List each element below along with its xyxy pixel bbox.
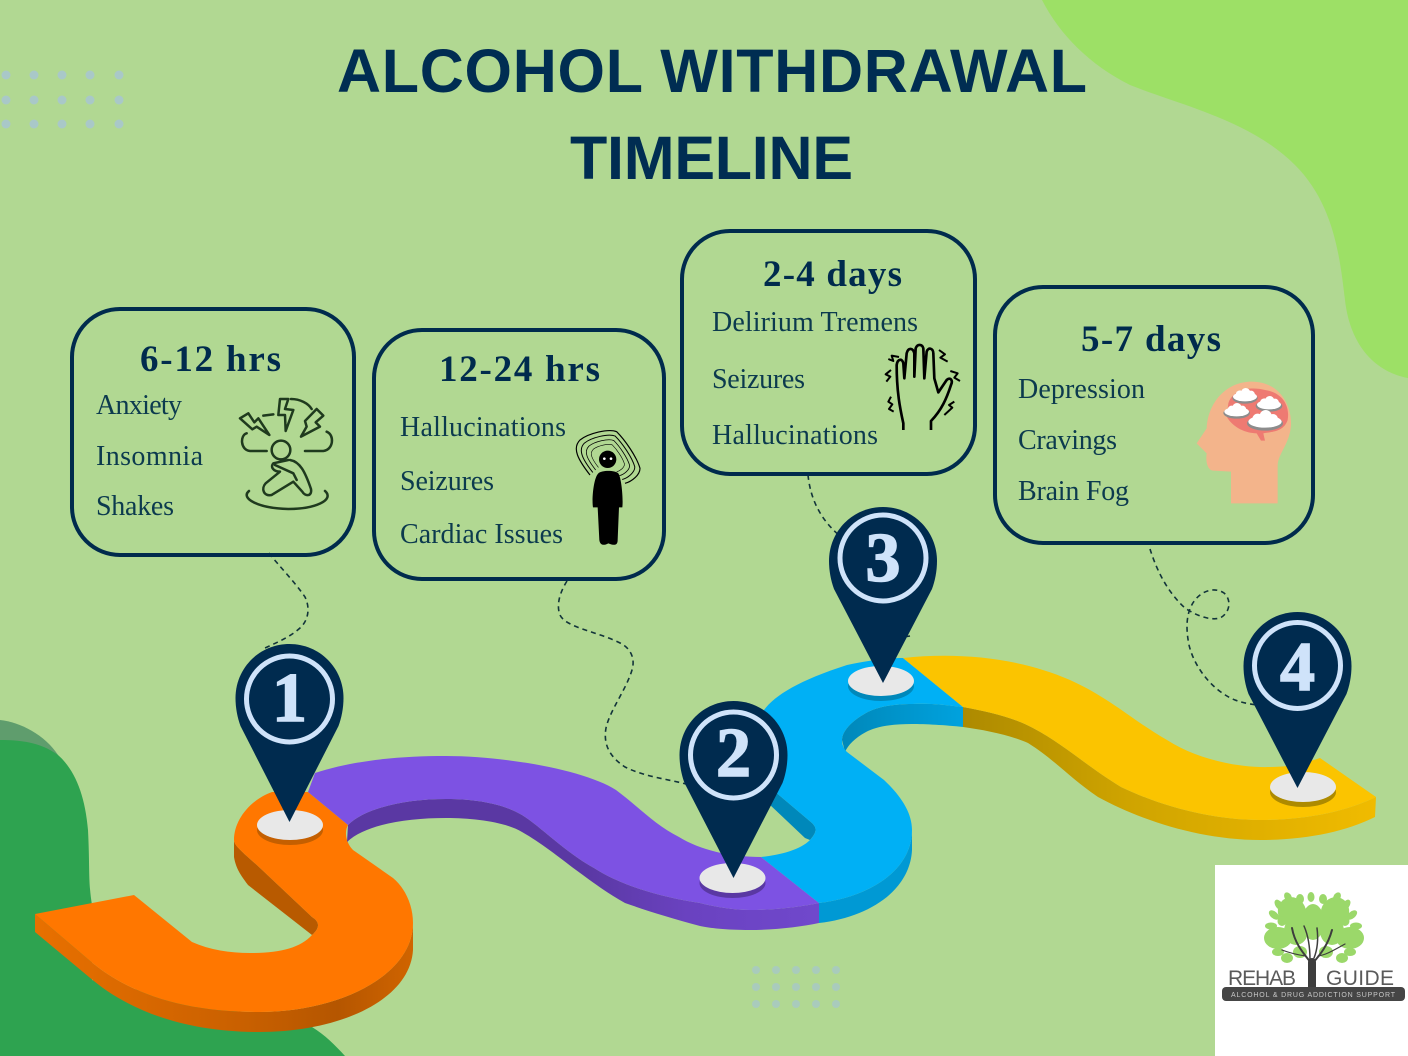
- pin base 4: [1270, 772, 1336, 807]
- title: TIMELINE: [570, 124, 853, 192]
- title: [337, 37, 1087, 192]
- connector: card 4 to pin 4: [1150, 549, 1257, 705]
- panel: 2-4 days: [682, 231, 975, 474]
- pin 2: 2: [716, 715, 751, 792]
- panel: 5-7 days: Depression: [1018, 374, 1145, 405]
- logo: Rehab Guide: REHAB: [1228, 967, 1296, 990]
- pin base 2: [700, 863, 766, 898]
- panel: 12-24 hrs: 12-24 hrs: [439, 349, 600, 390]
- icon: stressed person: [240, 399, 332, 509]
- panel: 12-24 hrs: Hallucinations: [400, 412, 566, 443]
- panel: 6-12 hrs: Shakes: [96, 491, 174, 522]
- connector: card 2 to pin 2: [558, 581, 690, 785]
- panel: 2-4 days: Seizures: [712, 364, 805, 395]
- road: orange segment: [35, 792, 413, 1032]
- title: ALCOHOL WITHDRAWAL: [337, 37, 1087, 105]
- icon: shaking hand: [886, 345, 960, 430]
- blob: bottom left: [0, 720, 345, 1056]
- pin 1: 1: [272, 660, 307, 737]
- panel: 2-4 days: 2-4 days: [763, 254, 902, 295]
- panel: 2-4 days: Delirium Tremens: [712, 307, 918, 338]
- panel: 5-7 days: 5-7 days: [1081, 319, 1221, 360]
- panel: 12-24 hrs: Cardiac Issues: [400, 519, 563, 550]
- road: blue segment: [750, 658, 963, 923]
- panel: 2-4 days: Hallucinations: [712, 420, 878, 451]
- panel: 6-12 hrs: Anxiety: [96, 390, 182, 421]
- panel: 12-24 hrs: Seizures: [400, 466, 494, 497]
- panel: 5-7 days: [995, 287, 1313, 543]
- panel: 6-12 hrs: 6-12 hrs: [140, 339, 281, 380]
- road: yellow segment: [903, 656, 1376, 840]
- pin 4: [1244, 612, 1352, 788]
- logo: Rehab Guide: [1215, 865, 1408, 1056]
- pin base 3: [848, 666, 914, 701]
- panel: 12-24 hrs: [374, 330, 664, 579]
- panel: 6-12 hrs: [72, 309, 354, 555]
- dot grid: bottom centre: [752, 966, 840, 1008]
- icon: person with hallucination waves: [576, 431, 640, 545]
- pin 3: 3: [866, 520, 900, 597]
- pin 4: 4: [1280, 629, 1315, 706]
- pin 3: [829, 507, 937, 683]
- icon: head with foggy brain: [1197, 382, 1291, 503]
- dot grid: top left: [2, 70, 124, 128]
- pin 1: [236, 644, 344, 822]
- panel: 6-12 hrs: Insomnia: [96, 441, 204, 472]
- pin 2: [680, 701, 788, 878]
- connector: card 1 to pin 1: [265, 553, 308, 648]
- panel: 5-7 days: Cravings: [1018, 425, 1117, 456]
- logo: Rehab Guide: ALCOHOL & DRUG ADDICTION SUPPORT: [1231, 992, 1396, 999]
- blob: top right: [1042, 0, 1408, 378]
- icon: tree crown: [1264, 891, 1364, 963]
- icon: tree trunk: [1282, 926, 1345, 988]
- road: purple segment: [308, 756, 819, 930]
- logo: Rehab Guide: GUIDE: [1326, 967, 1394, 990]
- connector: card 3 to pin 3: [808, 475, 910, 638]
- panel: 5-7 days: Brain Fog: [1018, 476, 1129, 507]
- pin base 1: [257, 810, 323, 845]
